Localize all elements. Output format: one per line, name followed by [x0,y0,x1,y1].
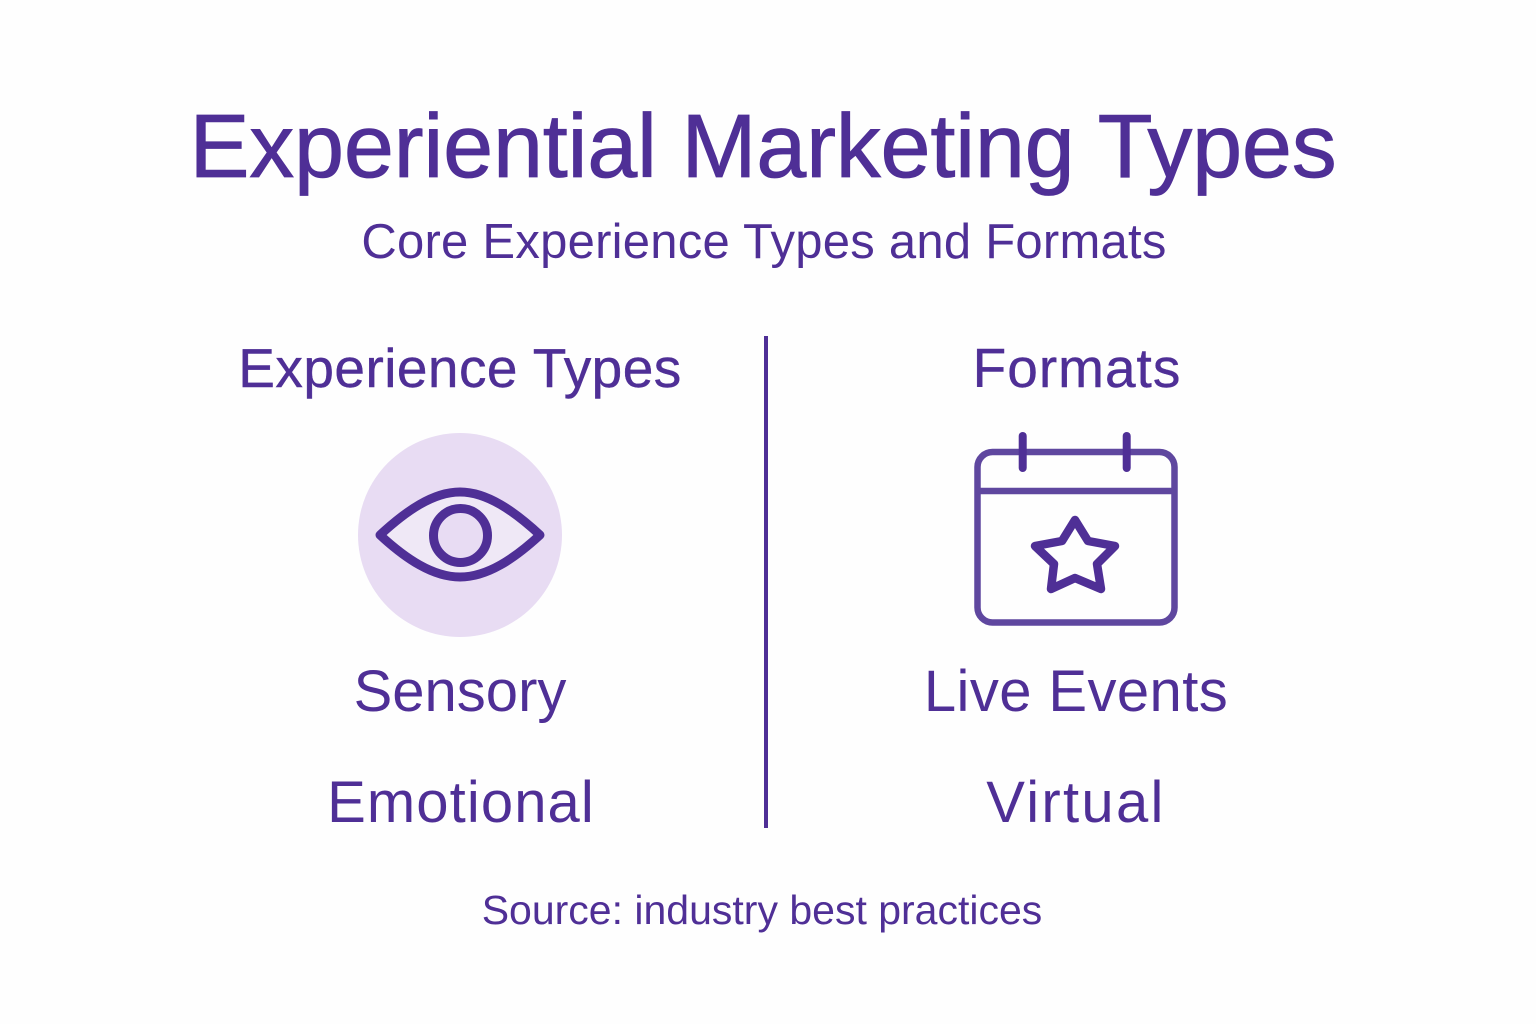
source note: Source: industry best practices [482,887,1042,933]
column heading: experience types: Experience Types [238,337,682,399]
label: virtual: Virtual [986,770,1166,835]
label: live events: Live Events [924,659,1228,724]
subtitle: Core Experience Types and Formats [361,215,1167,269]
icon: eye in circle [358,433,562,637]
column heading: formats: Formats [973,337,1181,399]
label: emotional: Emotional [327,770,595,835]
title: Experiential Marketing Types [190,97,1336,197]
center divider [764,336,768,828]
icon: calendar with star [974,432,1178,626]
label: sensory: Sensory [354,659,566,724]
